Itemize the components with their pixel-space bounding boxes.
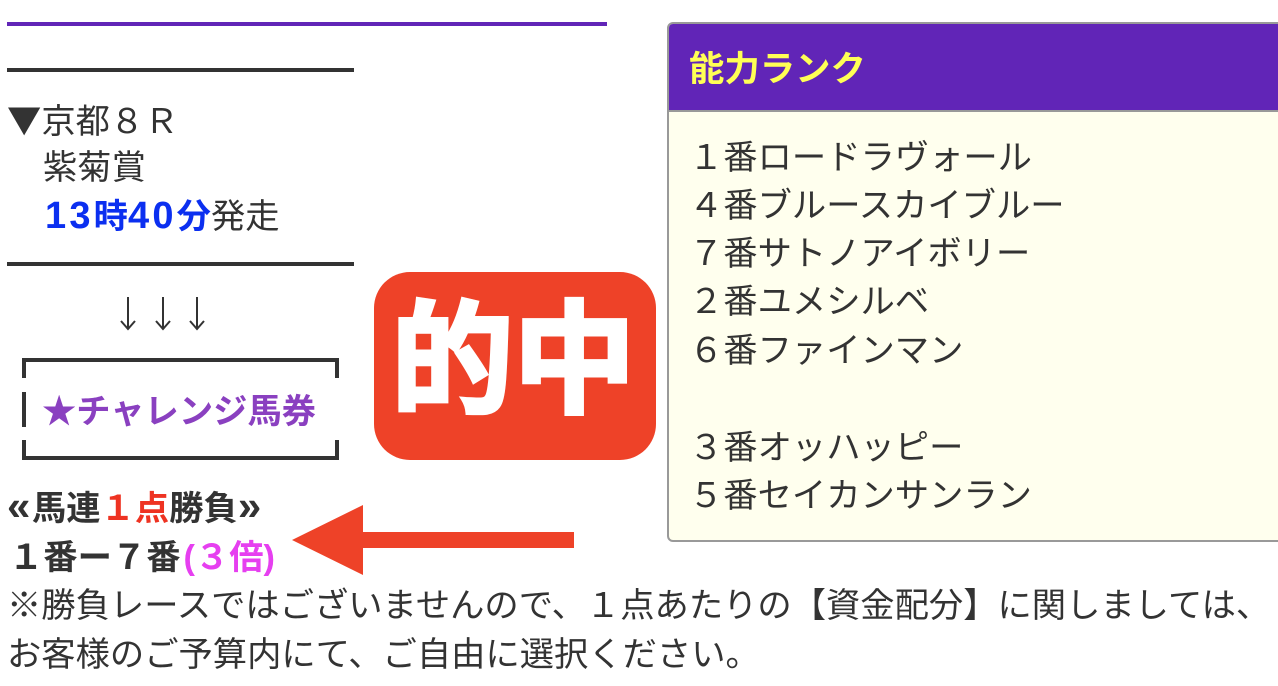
race info	[7, 93, 280, 237]
rank 5: ６番ファインマン	[689, 332, 963, 370]
rank list	[689, 139, 1065, 515]
rank 4: ２番ユメシルベ	[689, 283, 929, 321]
box frame	[22, 358, 339, 460]
race title: 紫菊賞	[43, 149, 146, 187]
panel heading: 能力ランク	[689, 49, 866, 89]
race info top rule	[7, 68, 354, 72]
note line 2: お客様のご予算内にて、ご自由に選択ください。	[7, 636, 760, 674]
bet type: »	[238, 482, 261, 529]
icon: down arrows	[120, 297, 205, 330]
start time: 13時40分発走	[45, 195, 280, 237]
rank 3: ７番サトノアイボリー	[689, 235, 1030, 273]
note line 1: ※勝負レースではございませんので、１点あたりの【資金配分】に関しましては、	[7, 587, 1270, 625]
rank 2: ４番ブルースカイブルー	[689, 187, 1065, 225]
hit stamp	[374, 272, 656, 460]
icon: red arrow	[292, 505, 574, 575]
hit stamp: 的中	[392, 293, 636, 429]
race info bottom rule	[7, 262, 354, 266]
rank 7: ５番セイカンサンラン	[689, 477, 1032, 515]
rank 6: ３番オッハッピー	[689, 429, 963, 467]
bet type: «	[7, 482, 30, 529]
race name line: ▼京都８Ｒ	[7, 93, 179, 143]
rank 1: １番ロードラヴォール	[689, 139, 1032, 177]
note	[7, 587, 1270, 674]
panel heading	[669, 24, 1278, 112]
bet type	[7, 482, 261, 529]
bet type: 馬連１点勝負	[32, 490, 238, 528]
challenge ticket box	[22, 358, 339, 460]
purple top rule	[7, 22, 607, 26]
panel: ability rank	[667, 22, 1278, 542]
challenge ticket label: ★チャレンジ馬券	[42, 393, 316, 431]
bet result: １番ー７番(３倍)	[9, 539, 275, 577]
